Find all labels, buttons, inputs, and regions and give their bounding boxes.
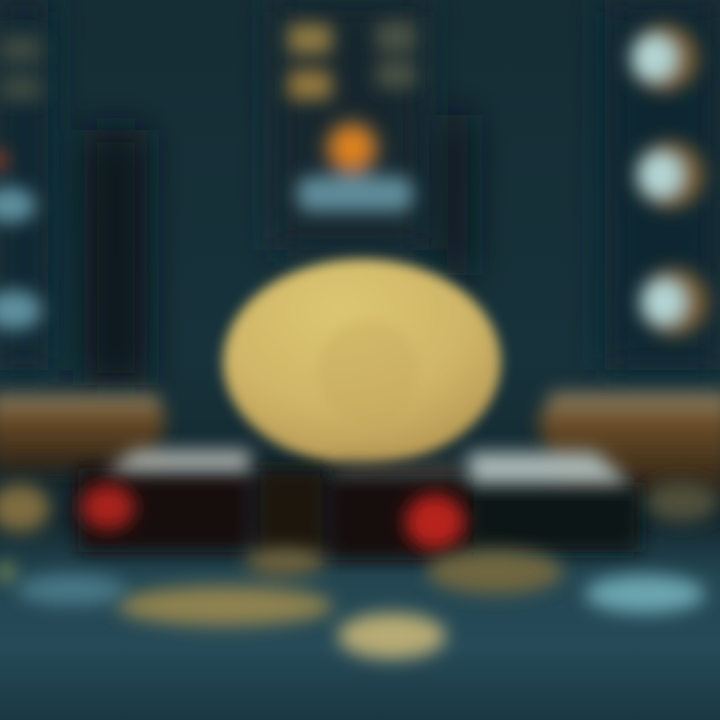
top centre icons — [288, 22, 416, 212]
dark vertical panels — [0, 0, 720, 385]
dark boxes — [78, 468, 640, 560]
large gold coin — [223, 259, 501, 465]
right circle icons — [630, 24, 708, 336]
left edge icons — [0, 35, 42, 330]
floor highlights — [17, 575, 705, 613]
left bowl — [0, 394, 166, 472]
white box lids — [105, 450, 632, 484]
red buttons — [81, 484, 465, 550]
right bowl — [538, 392, 720, 495]
scattered gold coins on floor — [0, 482, 718, 659]
